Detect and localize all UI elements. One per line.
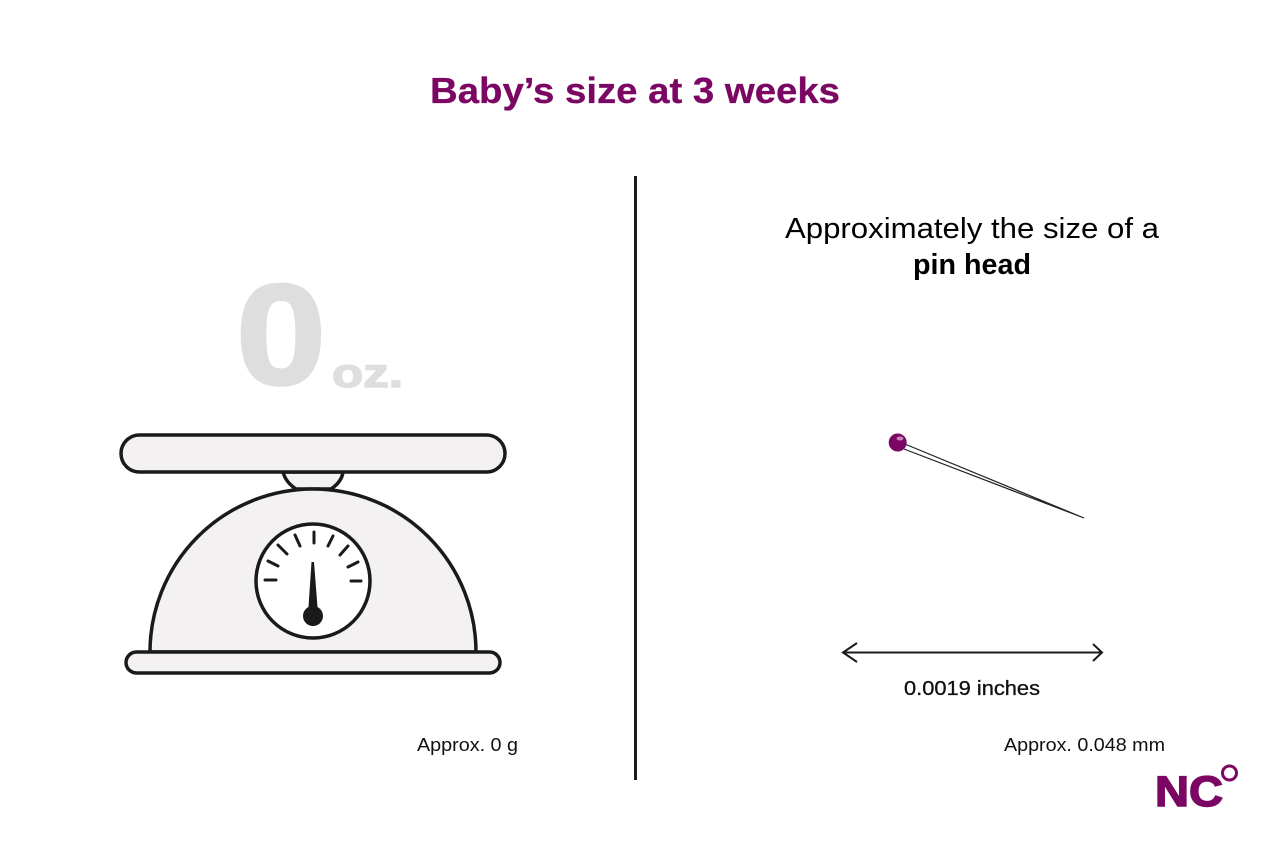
arrow: width measurement [843,643,1102,662]
comparison heading: pin head [913,249,1031,281]
icon: kitchen scale [121,435,505,673]
comparison heading: Approximately the size of a [785,213,1160,245]
divider [634,176,637,780]
big weight number [236,256,403,415]
panel: weight [121,256,518,755]
icon: pin [889,434,1084,518]
big weight number: oz. [332,350,403,396]
big weight number: 0 [236,256,326,415]
comparison heading [785,213,1160,281]
logo: NC [1155,768,1223,816]
scale dial [256,524,370,638]
millimetres caption: Approx. 0.048 mm [1004,735,1165,755]
weight caption: Approx. 0 g [417,735,518,755]
inches label: 0.0019 inches [904,678,1040,700]
title: Baby’s size at 3 weeks [430,70,840,111]
panel: size comparison [785,213,1165,755]
